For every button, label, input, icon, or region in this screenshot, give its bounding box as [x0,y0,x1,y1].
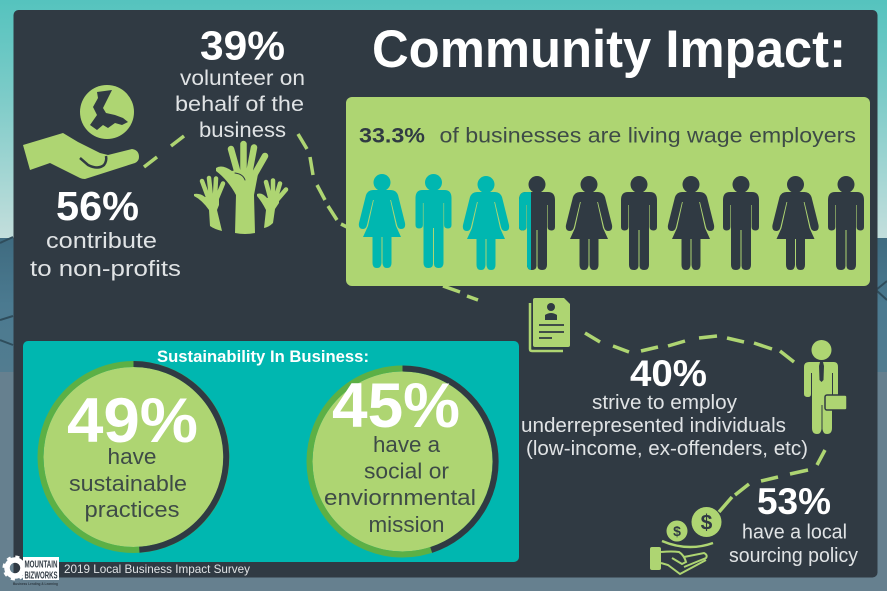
chart: 49% donut: have [108,444,156,469]
stat: 39% volunteer: volunteer on [180,66,305,90]
stat: 53% local sourcing: sourcing policy [729,545,858,567]
chart: 45% donut: 45% [332,371,460,441]
logo: Mountain BizWorks: Business Lending & Learning [13,581,58,586]
dashed connector: volunteers to living wage panel [298,134,347,227]
chart: 49% donut: practices [84,497,180,522]
icon: raised hands [194,144,286,234]
footer source note: 2019 Local Business Impact Survey [64,562,250,576]
stat: 40% underrepresented [521,353,808,460]
stat: 53% local sourcing: have a local [742,522,847,544]
title: Community Impact: [372,20,846,79]
heading: sustainability: Sustainability In Business: [157,348,369,366]
stat: 39% volunteer: 39% [200,22,285,68]
chart: 45% donut: social or [364,458,449,484]
stat: 40% underrepresented: strive to employ [592,392,737,414]
chart: 45% donut: enviornmental [324,485,476,510]
pictogram: 3.3 of 10 people in teal [359,174,864,270]
panel: sustainability in business [23,341,519,562]
icon: resume document [530,298,570,351]
chart: 49% donut [40,364,226,550]
stat: 56% non-profits: to non-profits [30,256,181,281]
logo: Mountain BizWorks: MOUNTAIN [24,558,58,570]
dashed connector: businessman to money [719,450,825,512]
panel: living wage [346,97,870,286]
icon: hand with coins [650,507,722,574]
stat: 39% volunteer: behalf of the [175,92,304,116]
dashed connector: hand to volunteers [144,136,184,167]
text: living wage headline: 33.3% [359,124,425,148]
stat: 40% underrepresented: underrepresented individuals [521,415,786,437]
stat: 39% volunteer: business [199,118,286,142]
dashed connector: resume to businessman [585,333,794,362]
icon: hand holding globe [23,85,139,179]
stat: 56% non-profits: contribute [46,228,157,253]
stat: 53% local sourcing [729,481,858,567]
stat: 40% underrepresented: 40% [630,353,707,394]
stat: 56% non-profits: 56% [56,183,139,229]
dashed connector: panel to resume [443,286,478,300]
logo: Mountain BizWorks [4,557,59,586]
icon: hand with coins: $ [701,512,713,534]
text: living wage headline: of businesses are living wage employers [433,124,856,148]
chart: 49% donut: sustainable [69,471,187,496]
stat: 39% volunteer [175,22,305,142]
chart: 45% donut: have a [373,432,440,457]
stat: 56% non-profits [30,183,181,281]
icon: businessman with briefcase [804,340,847,434]
icon: hand with coins: $ [673,523,681,539]
chart: 45% donut: mission [368,512,444,537]
logo: Mountain BizWorks: BIZWORKS [24,570,58,582]
stat: 53% local sourcing: 53% [757,481,831,522]
chart: 49% donut: 49% [67,386,198,456]
stat: 40% underrepresented: (low-income, ex-offenders, etc) [526,438,808,460]
chart: 45% donut [310,368,496,554]
